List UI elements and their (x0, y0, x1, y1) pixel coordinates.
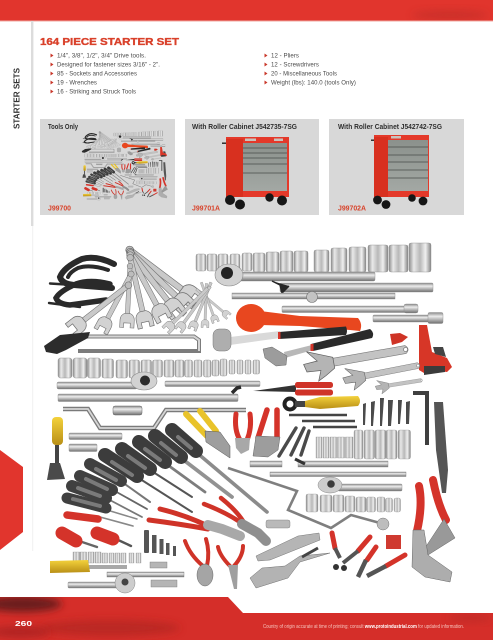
miniature tool set (82, 130, 168, 200)
three-eighths ratchet (318, 477, 402, 493)
small universal joints (150, 562, 177, 587)
large cold chisel (434, 402, 448, 493)
side label: starter sets: STARTER SETS (12, 68, 22, 129)
red bit holder (390, 333, 408, 345)
deep socket row (316, 430, 410, 459)
adjustable wrench large (302, 334, 411, 383)
half inch socket row (58, 358, 260, 378)
left red hexagon tab (0, 450, 23, 550)
quarter inch ratchet (68, 573, 135, 593)
feature list left: 85 - Sockets and Accessories (57, 70, 138, 78)
panel label: cabinet J542735: With Roller Cabinet J542735-7SG (192, 122, 297, 131)
panel: roller cabinet J542742 (329, 119, 464, 215)
punches and chisels (363, 398, 410, 426)
universal joint large (113, 406, 142, 415)
needle nose pliers (253, 382, 333, 396)
large combination wrenches (65, 240, 203, 337)
part number J99701A: J99701A (192, 204, 220, 212)
yellow spinner handle (50, 560, 127, 573)
utility knife (256, 533, 320, 561)
quarter inch extension (107, 572, 184, 577)
half inch speed handle (63, 409, 246, 428)
top socket row (196, 243, 431, 272)
ball peen hammer 1 (213, 326, 347, 351)
long red end cutters (204, 498, 266, 541)
header band (0, 0, 493, 22)
diagonal cutters (185, 539, 213, 586)
footer band (0, 596, 493, 640)
yellow tin snips (186, 411, 230, 458)
feature list left: 1/4", 3/8", 1/2", 3/4" Drive tools. (57, 52, 146, 60)
roller cabinet 2 (371, 135, 429, 209)
half inch flex handle (58, 387, 241, 402)
feature list right: 12 - Pliers (271, 52, 300, 60)
red screwdrivers (62, 515, 133, 547)
breaker bar (272, 281, 433, 293)
feature list left: Designed for fastener sizes 3/16" - 2". (57, 62, 160, 68)
roller cabinet 1 (222, 137, 289, 210)
pipe wrench (419, 325, 452, 375)
red box (386, 535, 401, 549)
pry bar (413, 393, 427, 445)
part number J99702A: J99702A (338, 204, 366, 212)
needle nose small pliers (218, 546, 243, 589)
footer disclaimer: Country of origin accurate at time of printing; consult www.protoindustrial.com for updated information. (263, 624, 464, 630)
main tool set photo (44, 240, 455, 593)
red groove joint pliers (253, 410, 280, 457)
spinner extension (250, 461, 282, 467)
groove joint pliers (412, 480, 455, 582)
yellow scraper (47, 417, 65, 480)
side rule (31, 21, 33, 226)
feature list right: 12 - Screwdrivers (271, 62, 320, 68)
panel label: tools only: Tools Only (48, 122, 78, 131)
extension bars (282, 304, 443, 324)
long red linesman pliers (149, 509, 240, 536)
feature list right (264, 52, 356, 86)
feature list left: 16 - Striking and Struck Tools (57, 88, 137, 96)
page number: 260 (15, 621, 32, 628)
small extensions (69, 433, 122, 452)
feature list left (50, 52, 160, 96)
flex handle (295, 459, 388, 467)
feature list left: 19 - Wrenches (57, 80, 98, 86)
locking pliers (250, 548, 330, 588)
feature list right: Weight (lbs): 140.0 (tools Only) (271, 80, 356, 86)
long pin punches (289, 415, 357, 427)
long extension (270, 472, 406, 476)
yellow ratchet screwdriver (284, 396, 360, 410)
panel: roller cabinet J542735 (185, 119, 319, 215)
adjustable wrench small (374, 373, 423, 395)
half inch ratchet (57, 372, 157, 390)
orange dead-blow mallet (236, 304, 361, 332)
panel: tools only (40, 119, 175, 215)
quarter inch sockets (73, 552, 141, 563)
red slip joint pliers (235, 414, 251, 454)
ball peen hammer 2 (263, 329, 373, 366)
long extension bar (232, 292, 395, 302)
dark drift punches (279, 428, 309, 456)
large ratchet (215, 264, 375, 286)
part number J99700: J99700 (48, 204, 71, 212)
hacksaw (44, 332, 199, 354)
red handled snap ring pliers 2 (358, 547, 405, 577)
speeder wrench (228, 468, 389, 530)
screwdriver set (67, 430, 267, 519)
adjustable wrench medium (341, 354, 422, 392)
panel label: cabinet J542742: With Roller Cabinet J542742-7SG (338, 122, 442, 131)
title: 164 PIECE STARTER SET (40, 37, 179, 48)
small combination wrenches (162, 281, 231, 334)
feature list right: 20 - Miscellaneous Tools (271, 70, 338, 78)
half inch extension (165, 381, 260, 386)
universal joint (266, 520, 290, 528)
shallow socket row (306, 494, 400, 512)
hex bits (144, 530, 176, 556)
red handled snap ring pliers (332, 533, 370, 571)
C-clamps (49, 258, 114, 307)
